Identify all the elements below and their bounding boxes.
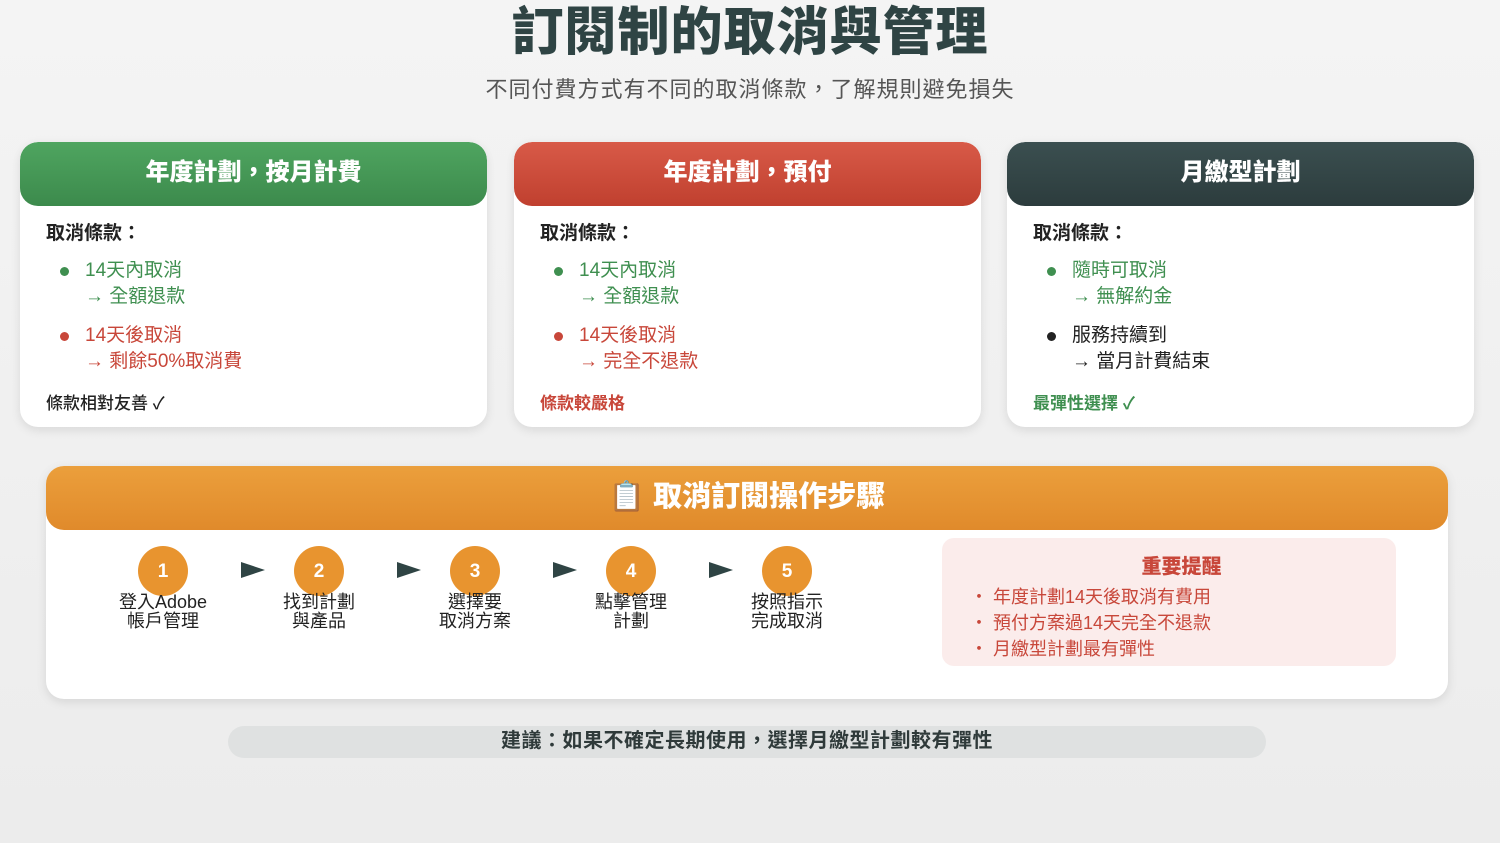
header green: 年度計劃，按月計費 <box>146 159 362 186</box>
item 1 <box>85 258 185 310</box>
item 2: → 當月計費結束 <box>1072 351 1210 372</box>
item 2 <box>579 323 698 375</box>
header red: 年度計劃，預付 <box>664 159 832 186</box>
panel: steps <box>46 466 1448 699</box>
header dark <box>1007 142 1474 206</box>
step 4: 4 <box>626 561 636 582</box>
header green <box>20 142 487 206</box>
step 4 <box>595 546 667 631</box>
label: 取消條款： <box>46 223 141 244</box>
step 3: 3 <box>470 561 480 582</box>
item 1: 14天內取消 <box>579 260 676 281</box>
steps header <box>46 466 1448 530</box>
item 2: → 剩餘50%取消費 <box>85 351 242 372</box>
item 2 <box>1072 323 1210 375</box>
step 5: 5 <box>782 561 792 582</box>
step 1 <box>119 546 207 631</box>
footer suggestion: 建議：如果不確定長期使用，選擇月繳型計劃較有彈性 <box>501 730 993 752</box>
item 1 <box>1072 258 1172 310</box>
header red <box>514 142 981 206</box>
header dark: 月繳型計劃 <box>1180 159 1300 186</box>
reminder box <box>942 538 1396 666</box>
step 2: 與產品 <box>292 611 346 631</box>
panel: monthly <box>1007 142 1474 427</box>
footer note: 條款相對友善 ✓ <box>46 394 165 413</box>
step 5 <box>751 546 823 631</box>
reminder list: ・ 年度計劃14天後取消有費用 <box>970 587 1211 607</box>
item 1: 隨時可取消 <box>1072 260 1167 281</box>
footer note: 最彈性選擇 ✓ <box>1033 394 1135 413</box>
item 1: 14天內取消 <box>85 260 182 281</box>
footer suggestion <box>228 726 1266 758</box>
step 3: 取消方案 <box>439 611 511 631</box>
item 1 <box>579 258 679 310</box>
step 2: 2 <box>314 561 324 582</box>
subtitle: 不同付費方式有不同的取消條款，了解規則避免損失 <box>485 77 1014 102</box>
panel: annual prepaid <box>514 142 981 427</box>
step 3 <box>439 546 511 631</box>
arrow <box>397 562 421 578</box>
step 4: 點擊管理 <box>595 592 667 612</box>
item 1: → 全額退款 <box>579 286 679 307</box>
reminder list: ・ 預付方案過14天完全不退款 <box>970 613 1211 633</box>
step 1: 帳戶管理 <box>127 611 199 631</box>
reminder title: 重要提醒 <box>1142 556 1222 578</box>
step 5: 完成取消 <box>751 611 823 631</box>
item 1: → 無解約金 <box>1072 286 1172 307</box>
reminder list: ・ 月繳型計劃最有彈性 <box>970 639 1155 659</box>
step 1: 1 <box>158 561 168 582</box>
item 2: → 完全不退款 <box>579 351 698 372</box>
arrow <box>709 562 733 578</box>
item 2: 14天後取消 <box>85 325 182 346</box>
title: 訂閱制的取消與管理 <box>511 4 988 62</box>
step 1: 登入Adobe <box>119 592 207 612</box>
label: 取消條款： <box>1033 223 1128 244</box>
arrow <box>553 562 577 578</box>
steps header: 📋 取消訂閱操作步驟 <box>609 481 885 513</box>
step 4: 計劃 <box>613 611 649 631</box>
item 2: 14天後取消 <box>579 325 676 346</box>
label: 取消條款： <box>540 223 635 244</box>
step 2: 找到計劃 <box>283 592 355 612</box>
panel: annual monthly <box>20 142 487 427</box>
item 1: → 全額退款 <box>85 286 185 307</box>
reminder list <box>970 587 1211 659</box>
item 2: 服務持續到 <box>1072 325 1167 346</box>
footer note: 條款較嚴格 <box>540 394 625 413</box>
item 2 <box>85 323 242 375</box>
step 2 <box>283 546 355 631</box>
step 5: 按照指示 <box>751 592 823 612</box>
step 3: 選擇要 <box>448 592 502 612</box>
arrow <box>241 562 265 578</box>
